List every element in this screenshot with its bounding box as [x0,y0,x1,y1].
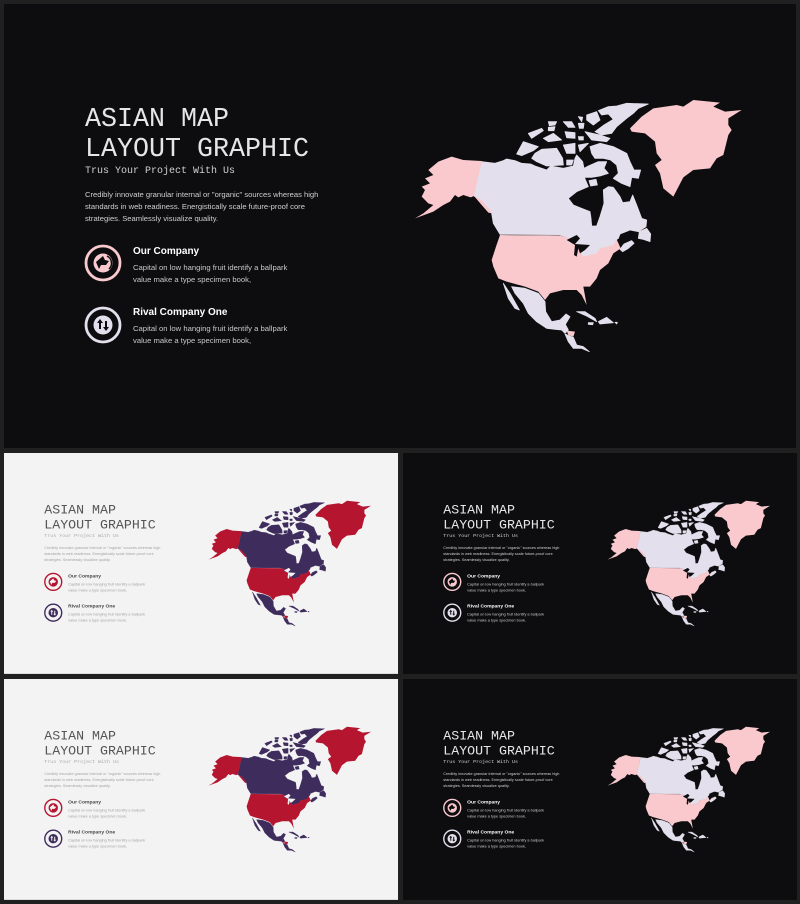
map: north america [608,726,770,852]
map: north america [208,500,371,626]
item: our company [443,798,544,818]
map: north america [208,726,371,852]
item: rival company one: Capital on low hanging fruit identify a ballpark [467,838,544,843]
panel: large dark slide [4,4,796,448]
item: rival company one: value make a type specimen book, [467,844,526,849]
panel: small light slide top [4,453,398,674]
map: north america [608,500,770,626]
intro text: standards in web readiness. Energistically scale future-proof core [44,552,154,556]
item: rival company one: Rival Company One [467,604,514,609]
intro text: standards in web readiness. Energistically scale future-proof core [443,552,553,556]
item: rival company one: Rival Company One [467,830,514,835]
item: our company: value make a type specimen book, [133,275,251,284]
intro text: strategies. Seamlessly visualize quality. [443,557,510,562]
item: our company: Capital on low hanging fruit identify a ballpark [467,808,544,812]
intro text: Credibly innovate granular internal or "organic" sources whereas high [85,190,318,199]
item: rival company one: value make a type specimen book, [68,844,127,849]
intro text: standards in web readiness. Energistically scale future-proof core [44,778,154,782]
item: our company: Capital on low hanging fruit identify a ballpark [467,582,544,586]
title: LAYOUT GRAPHIC [85,135,309,165]
item: rival company one: value make a type specimen book, [467,618,526,623]
title [443,503,555,533]
intro text [443,772,560,788]
item: our company: value make a type specimen book, [467,588,526,592]
title [85,105,309,165]
title [44,729,156,759]
item: our company: value make a type specimen book, [68,588,127,592]
intro text: strategies. Seamlessly visualize quality. [44,557,111,562]
intro text: standards in web readiness. Energistically scale future-proof core [443,778,553,782]
item: our company: Our Company [68,799,101,805]
subtitle: Trus Your Project With Us [44,534,119,539]
title: ASIAN MAP [44,729,116,744]
intro text: standards in web readiness. Energistically scale future-proof core [85,202,305,211]
intro text: strategies. Seamlessly visualize quality. [44,783,111,788]
title: ASIAN MAP [443,503,515,518]
title: LAYOUT GRAPHIC [443,744,555,759]
subtitle: Trus Your Project With Us [443,760,518,765]
item: rival company one [443,604,544,623]
item: our company [44,798,145,818]
title: ASIAN MAP [85,105,229,135]
intro text [85,190,318,223]
item: our company: Our Company [467,799,500,805]
item: our company: Capital on low hanging fruit identify a ballpark [68,582,145,586]
subtitle: Trus Your Project With Us [44,760,119,765]
item: our company: Our Company [133,246,199,257]
item: rival company one [443,830,544,849]
intro text: Credibly innovate granular internal or "organic" sources whereas high [44,772,160,776]
item: rival company one: Capital on low hanging fruit identify a ballpark [467,612,544,617]
item: rival company one: Rival Company One [133,307,227,318]
item: rival company one: Rival Company One [68,830,115,835]
item: our company: Our Company [467,573,500,579]
title: LAYOUT GRAPHIC [44,744,156,759]
intro text [443,546,560,562]
item: rival company one: Rival Company One [68,604,115,609]
item: our company: Capital on low hanging fruit identify a ballpark [133,263,287,272]
item: our company: value make a type specimen book, [68,814,127,818]
item: our company [44,572,145,592]
intro text: strategies. Seamlessly visualize quality. [443,783,510,788]
item: our company [443,572,544,592]
item: our company: value make a type specimen book, [467,814,526,818]
title [44,503,156,533]
item: rival company one [44,830,145,849]
intro text [44,772,160,788]
intro text: Credibly innovate granular internal or "organic" sources whereas high [443,772,559,776]
item: rival company one [84,306,288,345]
item: our company [84,244,288,284]
item: rival company one [44,604,145,623]
intro text: Credibly innovate granular internal or "organic" sources whereas high [44,546,160,550]
item: our company: Capital on low hanging fruit identify a ballpark [68,808,145,812]
intro text: strategies. Seamlessly visualize quality. [85,214,218,223]
item: rival company one: Capital on low hanging fruit identify a ballpark [133,324,287,333]
item: rival company one: Capital on low hanging fruit identify a ballpark [68,838,145,843]
item: rival company one: value make a type specimen book, [68,618,127,623]
intro text: Credibly innovate granular internal or "organic" sources whereas high [443,546,559,550]
map: north america [415,100,742,352]
intro text [44,546,160,562]
subtitle: Trus Your Project With Us [443,534,518,539]
item: our company: Our Company [68,573,101,579]
panel: small light slide bottom [4,679,398,900]
title: LAYOUT GRAPHIC [44,518,156,533]
panel: small dark slide bottom [403,679,797,900]
title: ASIAN MAP [44,503,116,518]
item: rival company one: Capital on low hanging fruit identify a ballpark [68,612,145,617]
title [443,729,555,759]
title: LAYOUT GRAPHIC [443,518,555,533]
item: rival company one: value make a type specimen book, [133,336,251,345]
title: ASIAN MAP [443,729,515,744]
panel: small dark slide top [403,453,797,674]
subtitle: Trus Your Project With Us [85,166,235,177]
